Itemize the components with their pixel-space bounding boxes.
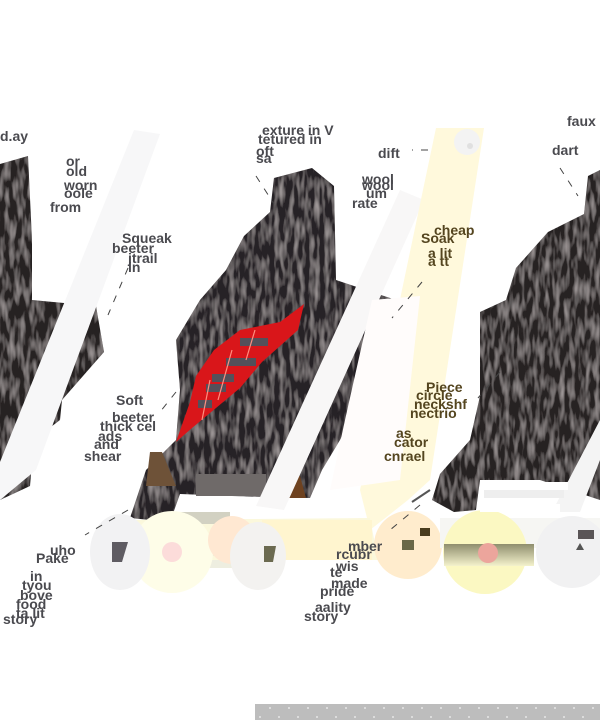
label: bottom left: Pake xyxy=(36,550,69,566)
label: old worn xyxy=(50,153,97,215)
label: bottom centre: made xyxy=(331,575,368,591)
label: squeak: jtrail xyxy=(127,250,158,266)
label: soft thick: beeter xyxy=(112,409,155,425)
label: old worn: from xyxy=(50,199,81,215)
label: bottom centre: te xyxy=(330,564,343,580)
label: soft thick: Soft xyxy=(116,392,144,408)
label: cheap soak: Soak xyxy=(421,230,455,246)
label: wool rate xyxy=(352,171,394,211)
label: top right xyxy=(552,113,596,158)
walker: pink-white panel xyxy=(330,296,420,490)
label: wool rate: rate xyxy=(352,195,378,211)
label: bottom centre: wis xyxy=(335,558,359,574)
label: bottom left xyxy=(3,542,76,627)
wheel: grey left xyxy=(90,514,150,590)
walker: dark corner line xyxy=(412,490,430,502)
label: bottom left: food xyxy=(16,596,46,612)
walker: right white pole xyxy=(552,420,600,512)
label: piece neck: cnrael xyxy=(384,448,425,464)
leader lines xyxy=(85,150,578,535)
label: bottom centre: mber xyxy=(348,538,383,554)
wheel: grey right xyxy=(536,516,600,588)
white stripes on right base xyxy=(480,482,568,512)
label: top right: faux xyxy=(567,113,596,129)
label: old worn: or xyxy=(66,153,81,169)
label: cheap soak: a tt xyxy=(428,253,449,269)
label: texture: tetured in xyxy=(258,131,322,147)
label: piece neck: cator xyxy=(394,434,429,450)
label: bottom left: ta lit xyxy=(16,605,45,621)
label: old worn: worn xyxy=(63,177,97,193)
label: bottom centre: pride xyxy=(320,583,354,599)
label: squeak: in xyxy=(128,259,140,275)
red plaid bandana xyxy=(176,304,304,442)
wheel: left cream xyxy=(131,511,213,593)
right dog fur xyxy=(432,170,600,512)
wheel: peach centre right xyxy=(374,511,442,579)
label: old worn: old xyxy=(66,163,87,179)
walker: handle knob xyxy=(454,129,480,155)
label: bottom left: tyou xyxy=(22,577,52,593)
label: shift: dift xyxy=(378,145,400,161)
label: cheap soak xyxy=(421,222,474,269)
label: piece neck: Piece xyxy=(426,379,463,395)
label: wool rate: um xyxy=(366,185,387,201)
centre dog light belly xyxy=(196,474,266,496)
label: bottom centre: aality xyxy=(315,599,351,615)
label: piece neck xyxy=(384,379,467,464)
label: texture: exture in V xyxy=(262,122,334,138)
label: old worn: oole xyxy=(64,185,93,201)
walker: right base xyxy=(440,518,600,548)
label: cheap soak: a lit xyxy=(428,245,452,261)
label: bottom left: in xyxy=(30,568,42,584)
label: texture xyxy=(256,122,334,166)
label: wool rate: wool xyxy=(361,171,394,187)
label: wool rate: wool xyxy=(361,177,394,193)
walker: cream upright handle xyxy=(360,128,484,530)
left dog fur xyxy=(0,156,104,500)
label: soft thick: shear xyxy=(84,448,122,464)
label: soft thick: and xyxy=(94,436,119,452)
dotted footer bar xyxy=(255,704,600,720)
label: bottom left: story xyxy=(3,611,37,627)
label: top right: dart xyxy=(552,142,579,158)
walker: peach disk xyxy=(208,516,256,564)
label: squeak: Squeak xyxy=(122,230,172,246)
wheel: right cream xyxy=(443,510,534,594)
walker: pale board stripes xyxy=(130,512,240,568)
wheel: grey mid xyxy=(230,522,286,590)
label: top left: d.ay xyxy=(0,128,28,144)
label: piece neck: neckshf xyxy=(414,396,467,412)
brown fur patch left xyxy=(146,452,176,486)
walker: middle white pole xyxy=(256,190,424,510)
walker: cream bar xyxy=(262,520,372,560)
label: soft thick: ads xyxy=(98,428,122,444)
label: bottom left: uho xyxy=(50,542,76,558)
label: soft thick: thick cel xyxy=(100,418,156,434)
label: soft thick xyxy=(84,392,156,464)
brown fur patch right xyxy=(272,476,306,498)
centre dog fur xyxy=(130,168,396,522)
label: squeak xyxy=(112,230,172,275)
label: piece neck: nectrio xyxy=(410,405,457,421)
label: cheap soak: cheap xyxy=(434,222,474,238)
label: bottom centre: rcubr xyxy=(336,546,372,562)
label: bottom centre xyxy=(304,538,383,624)
walker: cream base left xyxy=(130,518,378,560)
label: squeak: beeter xyxy=(112,240,155,256)
label: piece neck: as xyxy=(396,425,412,441)
label: bottom left: bove xyxy=(20,587,53,603)
label: bottom centre: story xyxy=(304,608,338,624)
label: texture: oft xyxy=(256,143,274,159)
label: piece neck: circle xyxy=(416,387,453,403)
label: texture: sa xyxy=(256,150,272,166)
walker: left white pole xyxy=(0,130,160,500)
